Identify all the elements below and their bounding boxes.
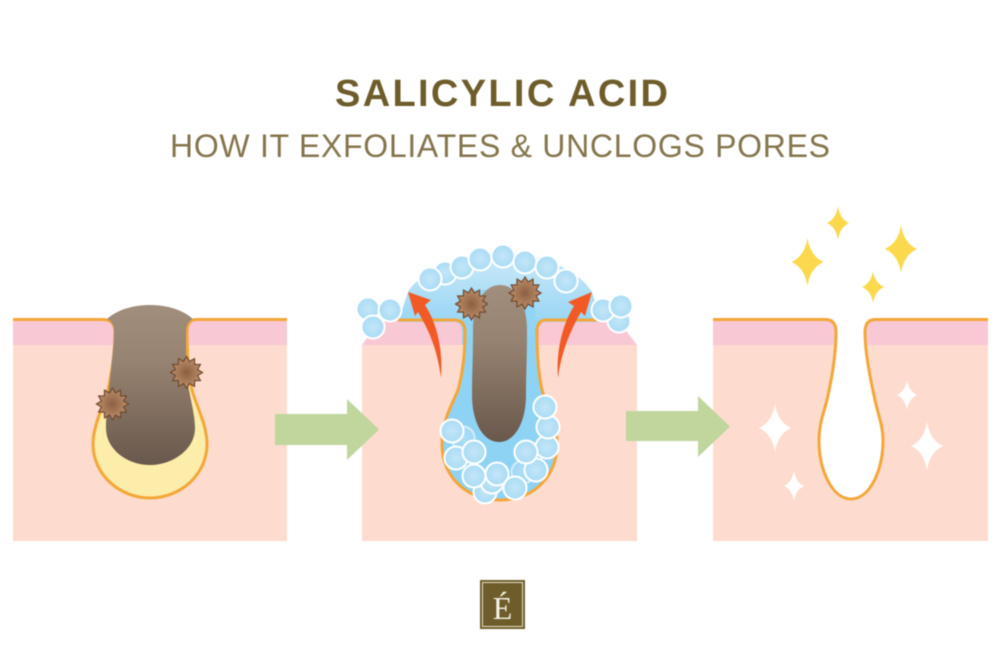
arrow: step one to two bbox=[275, 399, 379, 460]
bacteria right bbox=[170, 356, 202, 388]
white sparkles bbox=[759, 380, 943, 501]
subtitle: HOW IT EXFOLIATES & UNCLOGS PORES bbox=[170, 128, 830, 164]
panel: clogged pore bbox=[13, 305, 287, 541]
bubbles bbox=[356, 244, 632, 504]
clog plug shrinking bbox=[472, 285, 527, 442]
panel: acid treating pore bbox=[356, 244, 637, 541]
clean pore bbox=[713, 320, 988, 499]
clog plug bbox=[106, 305, 195, 465]
pore opening bbox=[834, 316, 867, 321]
blue acid dome bbox=[398, 252, 602, 345]
logo: É bbox=[493, 590, 512, 626]
skin block bbox=[13, 319, 287, 541]
bacteria left bbox=[96, 388, 128, 420]
bacteria lifted right bbox=[509, 277, 541, 309]
pink skin layer bbox=[713, 319, 988, 345]
blue upper pore cover bbox=[467, 290, 535, 335]
arrow: right lift bbox=[558, 292, 592, 378]
pink skin layer bbox=[13, 319, 287, 345]
arrow: step two to three bbox=[626, 396, 730, 457]
arrow: left lift bbox=[408, 292, 441, 378]
panel: clear pore bbox=[713, 206, 988, 541]
title: SALICYLIC ACID bbox=[335, 73, 668, 115]
pore filled with acid bbox=[398, 320, 602, 500]
skin block bbox=[713, 319, 988, 541]
yellow sparkles bbox=[792, 206, 917, 303]
pink skin layer bbox=[362, 320, 637, 345]
bacteria lifted bbox=[456, 288, 488, 320]
skin block with clipped corners bbox=[362, 345, 637, 541]
logo bbox=[480, 580, 525, 629]
pore with sebum bbox=[13, 320, 287, 498]
